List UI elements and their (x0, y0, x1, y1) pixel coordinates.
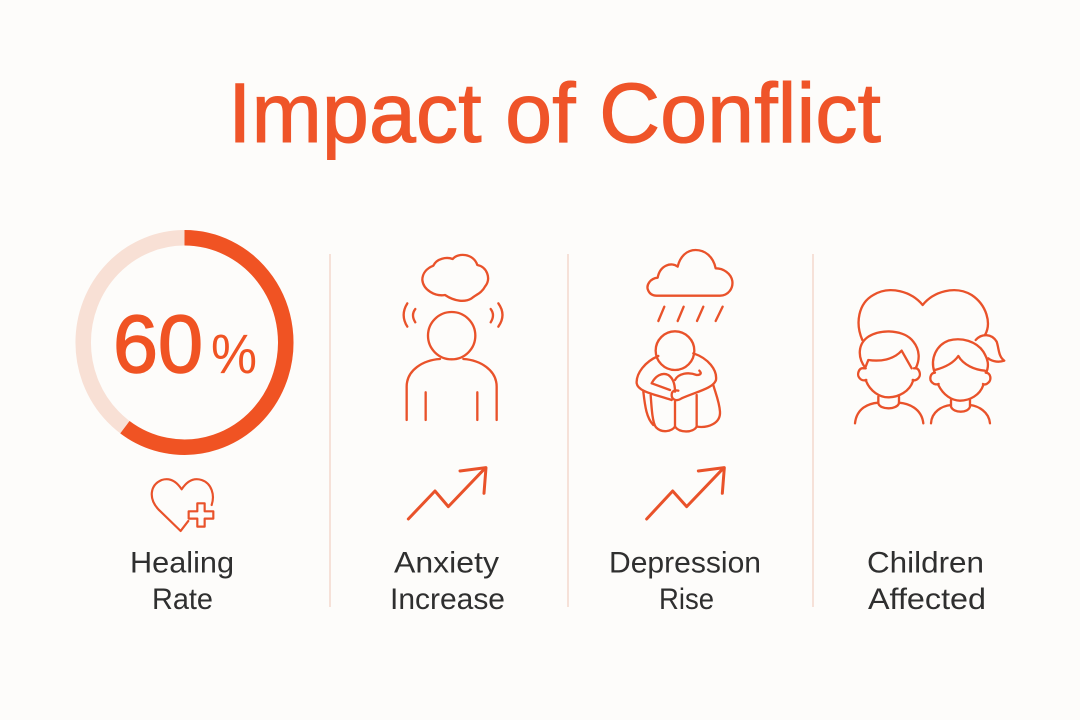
label: children affected: Children (867, 546, 984, 580)
icon: anxious person with cloud (404, 255, 502, 420)
donut chart: 60%: 60 (113, 299, 203, 390)
panel: children affected (855, 290, 1004, 616)
icon: huddled person (637, 331, 720, 431)
label: healing rate (130, 546, 234, 616)
panel: depression rise (609, 250, 761, 616)
icon: rising arrow (647, 468, 724, 519)
title: Impact of Conflict (228, 66, 881, 160)
label: depression rise: Depression (609, 546, 761, 580)
icon: rain cloud (647, 250, 732, 321)
label: anxiety increase (390, 546, 505, 616)
panel: anxiety increase (390, 255, 505, 616)
label: depression rise: Rise (659, 583, 714, 616)
label: healing rate: Healing (130, 546, 234, 580)
donut chart: 60%: % (211, 322, 257, 385)
panel: healing rate (83, 238, 286, 616)
label: healing rate: Rate (152, 583, 213, 616)
label: anxiety increase: Anxiety (394, 546, 499, 580)
label: depression rise (609, 546, 761, 616)
label: anxiety increase: Increase (390, 583, 505, 616)
label: children affected (867, 546, 986, 616)
icon: two children under a heart (855, 290, 1004, 423)
icon: rising arrow (408, 468, 486, 519)
icon: heart with plus (152, 479, 213, 531)
donut chart: 60% (83, 238, 286, 447)
label: children affected: Affected (868, 583, 986, 616)
